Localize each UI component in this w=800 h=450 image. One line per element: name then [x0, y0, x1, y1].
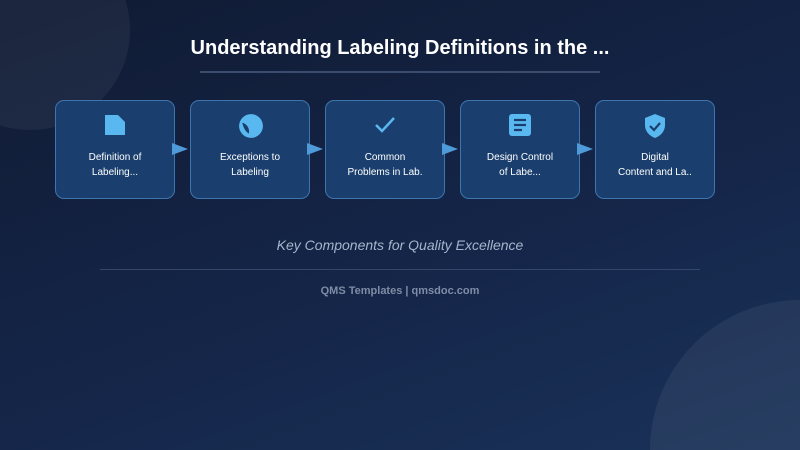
icon: shield check	[645, 114, 665, 138]
step 4: of Labe...	[499, 167, 541, 178]
icon: check	[375, 117, 395, 133]
title: Understanding Labeling Definitions in the ...	[191, 37, 609, 59]
step 3	[325, 100, 445, 199]
footer: QMS Templates | qmsdoc.com	[321, 285, 479, 297]
arrow 3	[442, 143, 458, 155]
step 2: Labeling	[231, 167, 269, 178]
step 5: Digital	[641, 152, 669, 163]
step 1: Definition of	[89, 152, 141, 163]
step 5	[595, 100, 715, 199]
arrow 4	[577, 143, 593, 155]
step 3: Common	[365, 152, 405, 163]
step 1	[55, 100, 175, 199]
arrow 2	[307, 143, 323, 155]
step 1: Labeling...	[92, 167, 138, 178]
icon: text doc	[509, 114, 531, 136]
step 4: Design Control	[487, 152, 553, 163]
step 2: Exceptions to	[220, 152, 280, 163]
subtitle: Key Components for Quality Excellence	[277, 237, 523, 253]
step 2	[190, 100, 310, 199]
step 4	[460, 100, 580, 199]
step 3: Problems in Lab.	[347, 167, 423, 178]
icon: leaf circle	[239, 114, 263, 138]
step 5: Content and La..	[618, 167, 692, 178]
icon: document	[105, 115, 125, 135]
arrow 1	[172, 143, 188, 155]
